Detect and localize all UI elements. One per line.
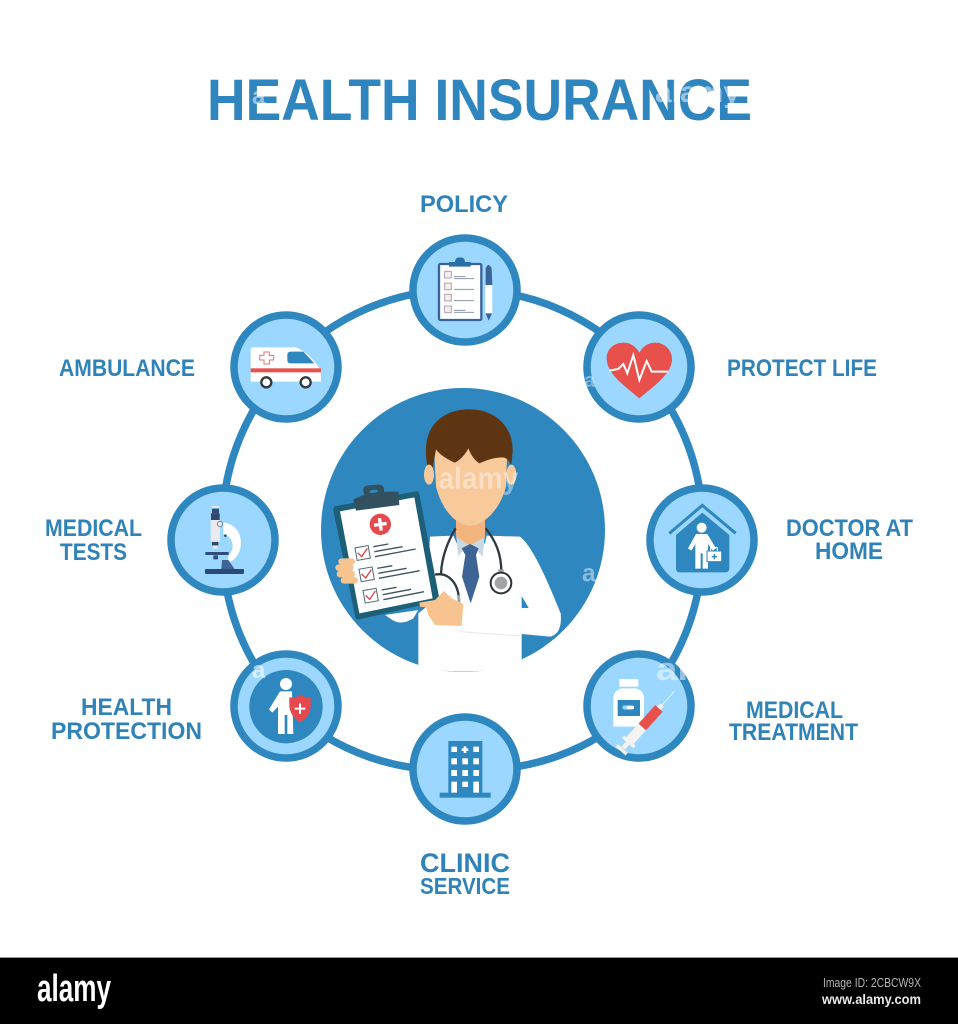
neck bbox=[456, 517, 485, 546]
clipboard bbox=[333, 485, 439, 619]
label: medical tests: MEDICAL bbox=[45, 515, 142, 542]
footer url: www.alamy.com bbox=[821, 991, 921, 1007]
hair bbox=[426, 409, 513, 477]
watermark fragments bbox=[252, 76, 740, 687]
left hand bbox=[335, 558, 358, 584]
label: doctor at home: DOCTOR AT bbox=[786, 515, 913, 542]
label: medical tests: TESTS bbox=[60, 539, 127, 566]
label: clinic service: SERVICE bbox=[420, 873, 510, 899]
node: doctor at home bbox=[650, 488, 754, 592]
collar bbox=[456, 534, 485, 557]
icon: ambulance van bbox=[251, 347, 321, 387]
footer logo: alamy bbox=[37, 968, 111, 1010]
label: clinic service bbox=[420, 848, 510, 899]
watermark fragments: a bbox=[584, 370, 596, 392]
icon: person with shield bbox=[249, 670, 323, 743]
label: health protection: HEALTH bbox=[81, 694, 172, 721]
icon: clipboard and pen bbox=[439, 257, 492, 321]
node: health protection bbox=[234, 654, 338, 758]
title: HEALTH INSURANCE bbox=[207, 68, 752, 133]
label: health protection: PROTECTION bbox=[51, 718, 202, 745]
node: medical tests bbox=[171, 488, 275, 592]
icon: hospital building bbox=[440, 741, 491, 798]
doctor illustration bbox=[333, 409, 596, 672]
label: health protection bbox=[51, 694, 202, 745]
icon: bottle and syringe bbox=[613, 679, 680, 756]
label: medical treatment bbox=[729, 697, 858, 746]
label: doctor at home bbox=[786, 515, 913, 565]
icon: microscope bbox=[205, 506, 244, 574]
node: clinic service bbox=[413, 717, 517, 821]
ring connecting the nodes bbox=[223, 290, 702, 770]
watermark fragments: a bbox=[252, 657, 266, 684]
icon: heart with pulse bbox=[607, 343, 672, 398]
label: medical tests bbox=[45, 515, 142, 566]
footer bar bbox=[0, 957, 958, 1024]
watermark fragments: al bbox=[656, 651, 688, 687]
doctor coat bbox=[418, 536, 561, 672]
ears bbox=[424, 465, 434, 485]
label: clinic service: CLINIC bbox=[420, 848, 510, 878]
sleeve under clipboard bbox=[385, 610, 418, 622]
stethoscope bbox=[441, 528, 501, 574]
coat detail bbox=[522, 596, 529, 608]
watermark letter: a bbox=[582, 560, 596, 587]
footer image id: Image ID: 2CBCW9X bbox=[823, 975, 921, 990]
label: medical treatment: MEDICAL bbox=[746, 697, 843, 724]
node: protect life bbox=[587, 315, 691, 419]
watermark on face: alamy bbox=[438, 461, 518, 495]
right hand bbox=[419, 591, 463, 626]
watermark fragments: a bbox=[252, 83, 266, 110]
label: doctor at home: HOME bbox=[815, 538, 883, 565]
label: protect life: PROTECT LIFE bbox=[727, 355, 877, 382]
face bbox=[434, 447, 507, 526]
tie bbox=[462, 544, 479, 603]
label: policy: POLICY bbox=[420, 191, 508, 218]
node: policy bbox=[413, 238, 517, 342]
watermark fragments: alamy bbox=[655, 76, 740, 109]
label: ambulance: AMBULANCE bbox=[59, 355, 195, 382]
node: medical treatment bbox=[587, 654, 691, 758]
label: medical treatment: TREATMENT bbox=[729, 719, 858, 746]
node: ambulance bbox=[234, 315, 338, 419]
central blue disc bbox=[321, 388, 605, 672]
icon: house with doctor bbox=[669, 505, 736, 572]
